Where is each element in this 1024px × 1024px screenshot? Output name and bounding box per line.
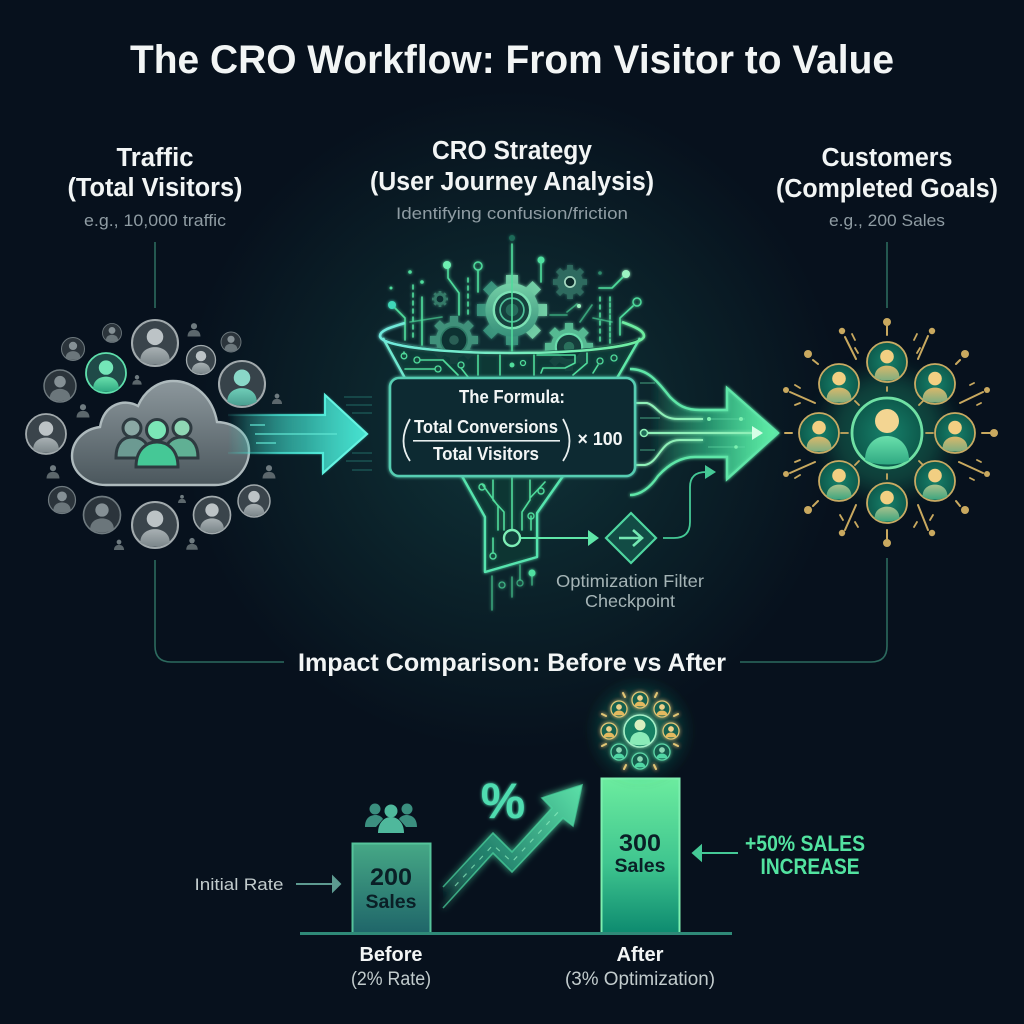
diamond icon [606, 513, 656, 563]
funnel with gears and circuits [380, 235, 644, 610]
optimization filter checkpoint [504, 465, 716, 591]
gold rays [783, 318, 998, 547]
mini gear [432, 291, 448, 307]
right gear [545, 323, 593, 371]
traffic visitor cloud cluster [26, 320, 282, 550]
initial rate arrow [296, 877, 340, 891]
increase arrow [693, 846, 738, 860]
percent sign: % [481, 773, 525, 829]
central customer avatar [852, 398, 922, 468]
impact comparison heading: Impact Comparison: Before vs After [298, 649, 726, 677]
column header: traffic: e.g., 10,000 traffic [84, 211, 227, 230]
cloud shape [72, 381, 249, 485]
bar chart: before vs after [194, 692, 865, 990]
before group icon [365, 804, 417, 833]
increase callout: INCREASE [760, 854, 860, 879]
gears [430, 265, 593, 371]
after label: (3% Optimization) [565, 969, 715, 990]
customers cluster [783, 318, 998, 547]
formula panel: × 100 [578, 429, 622, 449]
before bar: Sales [366, 891, 417, 913]
funnel lower spout [462, 476, 563, 572]
cloud user group icon [116, 419, 198, 467]
after bar [602, 778, 680, 934]
arrow to output [663, 465, 716, 538]
visitor avatars [26, 320, 282, 550]
before label: Before [360, 944, 422, 966]
column header: customers: Customers [822, 144, 952, 172]
column header: traffic: Traffic [116, 144, 194, 172]
after label [565, 944, 715, 990]
before label [351, 944, 431, 990]
after customers mini cluster [601, 692, 679, 769]
column header: customers: (Completed Goals) [776, 175, 998, 203]
traces below funnel [492, 565, 532, 610]
column header: traffic [68, 144, 242, 230]
funnel circuit traces [404, 352, 598, 377]
column header: CRO strategy [370, 137, 654, 223]
formula panel [390, 378, 635, 476]
before bar [352, 844, 430, 934]
increase callout [745, 831, 865, 879]
increase callout: +50% SALES [745, 831, 865, 856]
after bar: 300 [619, 830, 661, 857]
arrow: funnel to customers [630, 369, 778, 495]
column header: CRO strategy: Identifying confusion/friction [396, 204, 628, 223]
arrow: traffic into funnel [228, 395, 372, 473]
left gear [430, 316, 478, 364]
after label: After [616, 944, 664, 966]
growth arrow [443, 785, 582, 908]
filter node and arrow [504, 530, 599, 546]
initial rate label: Initial Rate [194, 875, 284, 894]
checkpoint label line 2: Checkpoint [585, 591, 675, 611]
formula panel: The Formula: [459, 386, 565, 407]
checkpoint label: Optimization Filter [556, 571, 704, 591]
column header: customers: e.g., 200 Sales [829, 211, 945, 230]
small dark gear [553, 265, 587, 299]
title: The CRO Workflow: From Visitor to Value [130, 38, 894, 82]
formula panel: Total Conversions [414, 417, 558, 437]
before label: (2% Rate) [351, 969, 431, 990]
customer avatars [799, 342, 975, 523]
before bar: 200 [370, 864, 412, 891]
connector lines to impact comparison [155, 242, 887, 662]
formula panel: Total Visitors [433, 444, 539, 464]
after bar: Sales [614, 855, 666, 877]
big gear [477, 275, 547, 345]
column header: traffic: (Total Visitors) [68, 174, 242, 202]
column header: CRO strategy: (User Journey Analysis) [370, 168, 654, 196]
column header: customers [776, 144, 998, 230]
funnel upper cone and rim [383, 338, 640, 378]
baseline [300, 932, 732, 935]
circuit traces above funnel [388, 235, 641, 352]
column header: CRO strategy: CRO Strategy [432, 137, 593, 165]
